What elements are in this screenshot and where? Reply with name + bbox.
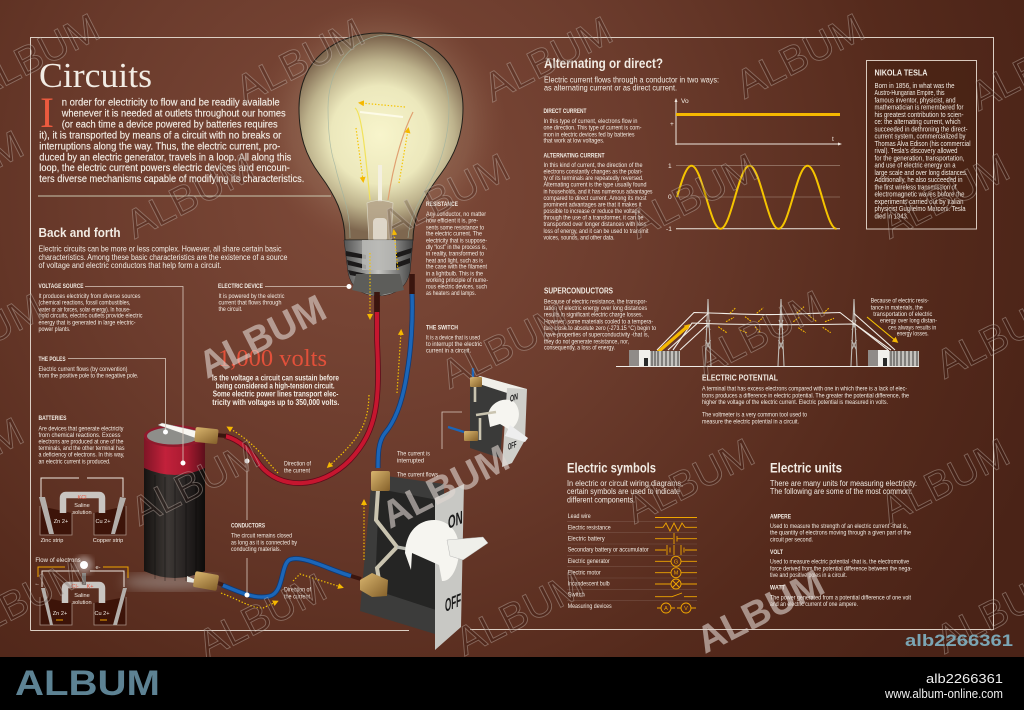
text: voltage source: power plants.	[38, 326, 71, 333]
text: batteries: from chemical reactions. Excess	[38, 432, 121, 439]
panel: nikola tesla: Born in 1856, in what was the	[874, 81, 954, 90]
text: batteries: a deficiency of electrons. In this way,	[38, 452, 125, 459]
alternating current text: electrons constantly changes as the polari-	[544, 169, 642, 176]
volt: Used to measure electric potential -that is, the electromotive	[770, 559, 909, 566]
text: voltage source: It produces electricity from diverse sources	[38, 293, 141, 300]
heading: Electric symbols	[567, 460, 656, 475]
text: energy losses note: tance in materials, the	[871, 304, 923, 311]
watermarks, outlined: ALBUM	[124, 433, 266, 534]
divider	[38, 195, 331, 197]
text: conductors	[231, 523, 298, 553]
text: energy losses note: energy over long distan-	[880, 318, 937, 325]
diagram: cell open circuit: Zinc strip	[41, 538, 63, 544]
watermarks, outlined: ALBUM	[449, 563, 591, 664]
watt: WATT	[770, 585, 785, 592]
text: electric potential: A terminal that has excess electrons compared with one in which there is a lack of elec-	[702, 386, 907, 393]
icon: main switch	[360, 471, 488, 650]
panel: alternating or direct	[544, 56, 719, 241]
text: energy losses note	[871, 298, 937, 338]
chart: direct current: t	[832, 136, 834, 143]
intro text: it), it is transported by means of a circuit with no breaks or	[39, 130, 282, 141]
icon: battery	[144, 423, 205, 583]
volt	[770, 549, 912, 579]
alternating current text: through the use of a transformer, it can be	[544, 215, 644, 222]
heading: Electric units	[770, 460, 842, 475]
icon: small switch, open: ON	[510, 391, 518, 404]
symbol names: Switch	[568, 592, 585, 599]
text: the switch: THE SWITCH	[426, 325, 458, 332]
label: current interrupted and flows: The current is	[397, 451, 431, 458]
on label: ON	[448, 508, 463, 534]
text: the switch: It is a device that is used	[426, 335, 480, 342]
label: current interrupted and flows	[397, 451, 439, 479]
panel: nikola tesla: Thomas Alva Edison (his commercial	[874, 139, 971, 148]
chart: alternating current: -1	[666, 226, 672, 233]
label: direction of the current, blue wire: the current	[284, 593, 310, 600]
text: superconductors: they do not generate resistance, nor,	[544, 338, 629, 345]
text: electric potential	[702, 374, 909, 425]
contact arm	[376, 490, 397, 580]
panel: nikola tesla	[866, 60, 976, 229]
diagram: cell closed circuit: solution	[72, 600, 92, 606]
label: current interrupted and flows: The current flows	[397, 472, 439, 479]
text: Electric circuits can be more or less complex. However, all share certain basic	[38, 244, 282, 254]
watermarks, outlined: ALBUM	[229, 11, 371, 112]
symbol names: Measuring devices	[568, 603, 612, 610]
ampere: AMPERE	[770, 513, 791, 520]
drop cap: I	[40, 90, 54, 137]
diagram: cell closed circuit: Cl-	[71, 584, 79, 590]
text: the switch	[426, 325, 483, 355]
filament	[355, 108, 413, 202]
text: energy losses note: energy losses.	[897, 331, 929, 338]
left power station	[629, 350, 680, 366]
diagram: cell open circuit: solution	[72, 510, 92, 516]
alternating current text: prominent advantages are that it makes it	[544, 202, 642, 208]
heading: Back and forth	[38, 226, 120, 240]
ampere: Used to measure the strength of an electric current -that is,	[770, 523, 908, 530]
text: resistance: the case with the filament	[426, 264, 487, 271]
panel: nikola tesla: succeeded in dethroning the direct-	[874, 124, 968, 133]
text: superconductors: Because of electric resistance, the transpor-	[544, 298, 647, 305]
panel: nikola tesla: for the generation, transportation,	[874, 153, 964, 162]
icon: light bulb	[299, 33, 463, 296]
direct current text: DIRECT CURRENT	[544, 108, 586, 115]
icon: connector, top	[194, 427, 219, 444]
diagram: cell closed circuit: e-	[96, 565, 101, 571]
panel: back and forth	[38, 226, 288, 270]
energy loss dashes	[718, 307, 834, 333]
alternating current text: ty of its terminals are repeatedly reversed.	[544, 175, 644, 182]
handle	[447, 537, 488, 560]
text: energy losses note: ces always results in	[888, 324, 937, 331]
callout: 1,000 volts: Is the voltage a circuit can sustain before	[212, 374, 339, 383]
watermarks, outlined: ALBUM	[874, 431, 1016, 532]
label: direction of the current, blue wire: Direction of	[284, 587, 311, 594]
text: superconductors	[544, 287, 656, 352]
panel: nikola tesla: Additionally, he also succeeded in	[874, 175, 963, 184]
plate	[435, 484, 464, 650]
diagram: power transmission	[616, 299, 919, 366]
text: superconductors: tation of electric energy over long distances	[544, 305, 648, 312]
rotary disc	[405, 520, 459, 581]
text: batteries: Are devices that generate electricity	[38, 425, 124, 432]
watermarks, outlined: ALBUM	[119, 146, 261, 247]
footer url: www.album-online.com	[884, 687, 1003, 701]
direct current text: that work at low voltages.	[544, 138, 605, 145]
panel: nikola tesla: NIKOLA TESLA	[874, 68, 928, 78]
text: batteries	[38, 415, 125, 465]
panel: nikola tesla: experiments carried out by Italian	[874, 197, 964, 206]
text: electric potential: higher the voltage of the electric current. Electric potential is measured in volts.	[702, 399, 888, 406]
panel: nikola tesla: the first wireless transmission of	[874, 182, 956, 191]
chart: alternating current	[666, 163, 840, 233]
symbol names: Electric generator	[568, 558, 610, 565]
panel: nikola tesla: physicist Guglielmo Marconi. Tesla	[874, 204, 966, 213]
panel: electric symbols: V	[684, 606, 688, 612]
right power station	[868, 350, 919, 366]
symbol names: Electric resistance	[568, 524, 611, 531]
chart: alternating current: 0	[668, 194, 672, 201]
watermarks, outlined: ALBUM	[434, 296, 576, 397]
callout: 1,000 volts: 1,000 volts	[218, 346, 327, 372]
text: voltage source: hold circuits, electric outlets provide electric	[38, 313, 143, 320]
text: characteristics. Among these basic characteristics are the existence of a source	[38, 252, 288, 262]
text: electric device	[218, 283, 285, 313]
diagram: cell closed circuit: Saline	[74, 593, 90, 599]
diagram: cell open circuit: Cu 2+	[95, 519, 111, 525]
text: resistance: the electric current. The	[426, 231, 482, 238]
panel: nikola tesla: large scale and over long distances.	[874, 168, 968, 177]
text: voltage source: water or air forces, solar energy). In house-	[38, 306, 130, 313]
volt: force derived from the potential difference between the nega-	[770, 565, 912, 572]
text: energy losses note: transportation of electric	[873, 311, 933, 318]
text: electric device: ELECTRIC DEVICE	[218, 283, 263, 290]
current direction arrows	[221, 103, 408, 608]
cables	[657, 312, 895, 350]
diagram: cell closed circuit: Zn 2+	[53, 611, 67, 617]
text: of voltage and electric conductors that help form a circuit.	[38, 260, 222, 270]
symbol names: Lead wire	[568, 513, 591, 520]
icon: small switch, open: OFF	[508, 439, 517, 453]
panel: electric symbols: G	[674, 559, 678, 565]
text: resistance: Any conductor, no matter	[426, 211, 487, 218]
panel: nikola tesla: mathematician is remembered for	[874, 103, 964, 112]
ground line	[616, 366, 919, 368]
text: conductors: The circuit remains closed	[231, 533, 292, 540]
outer frame	[30, 38, 994, 630]
panel: nikola tesla: ce: the alternating current, which	[874, 117, 961, 126]
text: resistance: dly “lost” in the process is,	[426, 244, 487, 251]
intro	[544, 75, 719, 93]
blue wire, upper	[378, 274, 412, 468]
volt: tive and positive poles in a circuit.	[770, 572, 847, 579]
glass stem	[367, 200, 393, 243]
footer id: alb2266361	[926, 671, 1003, 686]
panel: nikola tesla: and use of electric energy on a	[874, 161, 956, 170]
panel: title and introduction	[39, 56, 304, 185]
chart: direct current	[670, 98, 842, 146]
watermarks, outlined: ALBUM	[619, 431, 761, 532]
text: the switch: to interrupt the electric	[426, 341, 483, 348]
off label: OFF	[445, 590, 461, 617]
text: resistance: as heaters and lamps.	[426, 290, 476, 297]
label: direction of the current, red wire: the current	[284, 467, 310, 474]
text: the poles: Electric current flows (by convention)	[38, 366, 128, 373]
direct current text: one direction. This type of current is com-	[544, 125, 642, 132]
text: resistance	[425, 201, 488, 297]
panel: nikola tesla: current system, commercialized by	[874, 132, 966, 141]
direct current text: mon in electric devices fed by batteries	[544, 131, 635, 138]
diagram: cell open circuit: KCl	[77, 495, 87, 501]
label: direction of the current, red wire	[284, 461, 311, 474]
watt	[770, 585, 911, 608]
symbol names: Incandescent bulb	[568, 580, 610, 587]
direct current text	[544, 108, 642, 145]
text	[38, 244, 288, 270]
text: superconductors: SUPERCONDUCTORS	[544, 287, 613, 296]
text: electric device: the circuit.	[218, 306, 243, 313]
panel: nikola tesla: died in 1943.	[874, 211, 908, 220]
alternating current text: loss of energy, and it can be used to transmit	[544, 228, 649, 235]
separators	[567, 521, 697, 600]
text: resistance: how efficient it is, pre-	[426, 218, 478, 225]
yellow arrow, superconductor	[658, 326, 688, 352]
panel: nikola tesla: Austro-Hungarian Empire, this	[874, 88, 945, 97]
text: resistance: in a lightbulb. This is the	[426, 270, 483, 277]
callout: 1,000 volts: tricity with voltages up to 350,000 volts.	[212, 398, 339, 407]
battery halo	[122, 574, 218, 590]
text: energy losses note: Because of electric resis-	[871, 298, 929, 305]
intro text: n order for electricity to flow and be readily available	[62, 98, 280, 109]
icon: small switch, open	[448, 368, 528, 467]
chart: direct current: +	[670, 121, 674, 128]
intro: The following are some of the most common:	[770, 486, 912, 496]
footer logo: ALBUM	[15, 664, 160, 703]
text: conductors: conducting materials.	[231, 546, 281, 553]
chart: alternating current: 1	[668, 163, 672, 170]
alternating current text: Alternating current is the type usually found	[544, 182, 647, 189]
intro text: whenever it is needed at outlets throughout our homes	[61, 108, 286, 120]
text: superconductors: consequently, a loss of energy.	[544, 345, 615, 352]
text: the poles	[38, 356, 139, 380]
leader dots	[163, 284, 352, 598]
footer bar	[0, 657, 1024, 710]
alternating current text: ALTERNATING CURRENT	[544, 152, 604, 159]
text: resistance: heat and light, such as is	[426, 257, 484, 264]
text: resistance: sents some resistance to	[426, 224, 484, 231]
alternating current text: In this kind of current, the direction of the	[544, 162, 643, 169]
volt: VOLT	[770, 549, 783, 556]
text: batteries: BATTERIES	[38, 415, 67, 422]
diagram: cell open circuit	[39, 478, 126, 544]
intro text: interruptions along the way. Thus, the electric current, pro-	[39, 141, 280, 152]
connector bottom	[360, 573, 388, 597]
symbol names: Electric battery	[568, 535, 605, 542]
symbol names: Electric motor	[568, 569, 601, 576]
intro: certain symbols are used to indicate	[567, 486, 680, 496]
watermarks, outlined: ALBUM	[729, 6, 871, 107]
text: voltage source	[38, 283, 143, 333]
text: electric device: It is powered by the electric	[218, 293, 285, 300]
watermarks, outlined: ALBUM	[374, 146, 516, 247]
diagram: cell open circuit: Zn 2+	[54, 519, 68, 525]
text: electric potential: measure the electric potential in a circuit.	[702, 418, 799, 425]
watermarks, outlined: ALBUM	[689, 283, 831, 384]
label: direction of the current, blue wire	[284, 587, 311, 600]
text: voltage source: VOLTAGE SOURCE	[38, 283, 84, 290]
intro text: loop, the electric current powers electric devices and encoun-	[39, 163, 290, 174]
watermarks, bright: ALBUM	[192, 287, 333, 387]
intro text: ters diverse mechanisms capable of modifying its characteristics.	[39, 174, 304, 185]
diagram: cell open circuit: Saline	[74, 503, 90, 509]
text: batteries: electrons are produced at one of the	[38, 438, 124, 445]
diagram: cell closed circuit: Flow of electrons	[35, 558, 81, 564]
image id overlay: alb2266361	[905, 631, 1013, 650]
alternating current text: compared to direct current. Among its most	[544, 195, 647, 202]
watermarks, outlined: ALBUM	[622, 146, 764, 247]
intro	[567, 478, 683, 504]
alternating current text: transported over longer distances with less	[544, 221, 647, 228]
title: Circuits	[39, 56, 152, 95]
text: electric potential: trons produces a difference in electric potential. The greater the potential difference, the	[702, 392, 909, 399]
text: resistance: rous electric devices, such	[426, 283, 487, 290]
alternating current text	[544, 152, 653, 241]
text: the switch: current in a circuit.	[426, 348, 471, 355]
text: electric device: current that flows through	[218, 300, 282, 307]
panel: nikola tesla: rival). Tesla's discovery allowed	[874, 146, 958, 155]
text: conductors: CONDUCTORS	[231, 523, 265, 530]
text: resistance: RESISTANCE	[426, 201, 458, 208]
ampere: circuit per second.	[770, 536, 813, 543]
intro: In electric or circuit wiring diagrams,	[567, 478, 683, 488]
ampere: the quantity of electrons moving through a given part of the	[770, 530, 911, 537]
text: conductors: as long as it is connected by	[231, 539, 298, 546]
intro: Electric current flows through a conductor in two ways:	[544, 75, 719, 85]
callout: 1,000 volts: Some electric power lines transport elec-	[213, 390, 339, 399]
direct current text: In this type of current, electrons flow in	[544, 118, 638, 125]
symbols	[655, 518, 697, 613]
intro: as alternating current or as direct current.	[544, 83, 677, 93]
alternating current text: possible to increase or reduce the voltage	[544, 208, 641, 215]
panel: electric symbols	[567, 460, 697, 613]
watermarks, outlined: ALBUM	[874, 146, 1016, 247]
text: resistance: electricity that is suppose-	[426, 237, 487, 244]
intro text: duced by an electric generator, travels in a loop. All along this	[39, 152, 291, 163]
bulb glow	[256, 0, 506, 250]
callout: 1,000 volts	[212, 346, 339, 407]
panel: nikola tesla: famous inventor, physicist, and	[874, 96, 956, 104]
alternating current text: voices, sounds, and other data.	[544, 234, 615, 241]
text: voltage source: (chemical reactions, fossil combustibles,	[38, 300, 131, 307]
heading: Alternating or direct?	[544, 56, 663, 71]
diagram: cell open circuit: Copper strip	[93, 538, 123, 544]
watt: The power generated from a potential difference of one volt	[770, 594, 911, 601]
label: current interrupted and flows: interrupted	[397, 457, 424, 464]
towers	[705, 299, 857, 366]
text: superconductors: results in significant electric charge losses.	[544, 312, 643, 319]
panel: electric symbols: M	[674, 571, 679, 577]
blue wire, lower	[218, 559, 361, 597]
text: electric potential: The voltmeter is a very common tool used to	[702, 412, 807, 419]
text: resistance: working principle of nume-	[425, 277, 488, 284]
intro text: (or each time a device powered by batteries requires	[62, 119, 278, 130]
chart: direct current: Vo	[681, 98, 689, 105]
text: batteries: an electric current is produced.	[38, 458, 111, 465]
panel: nikola tesla: electromagnetic waves before the	[874, 190, 964, 199]
panel: electric symbols: A	[664, 606, 668, 612]
connector top	[371, 471, 390, 491]
icon: connector, bottom	[193, 571, 219, 591]
watermarks, outlined: ALBUM	[477, 9, 619, 110]
symbol names	[568, 513, 649, 610]
text: the poles: THE POLES	[38, 356, 66, 363]
text: the poles: from the positive pole to the negative pole.	[38, 372, 139, 380]
label: direction of the current, red wire: Direction of	[284, 461, 311, 468]
text: superconductors: However, some materials cooled to a tempera-	[544, 318, 653, 325]
panel: electric units	[770, 460, 917, 608]
intro	[770, 478, 917, 496]
watermarks, bright	[192, 287, 831, 662]
intro: different components.	[567, 494, 635, 504]
positive terminal tab	[158, 423, 197, 438]
text: batteries: terminals, and the other terminal has	[38, 445, 125, 452]
diagram: cell closed circuit: Cu 2+	[94, 611, 110, 617]
intro text	[39, 98, 304, 185]
ampere	[770, 513, 911, 543]
alternating current text: in households, and it has numerous advantages	[544, 188, 653, 195]
intro: There are many units for measuring electricity.	[770, 478, 917, 488]
text: electric potential: ELECTRIC POTENTIAL	[702, 374, 778, 383]
text: voltage source: energy that is generated in large electric-	[38, 319, 136, 326]
diagram: cell closed circuit: K+	[86, 584, 94, 590]
red wire	[216, 292, 378, 483]
panel: nikola tesla: his greatest contribution to scien-	[874, 110, 964, 119]
text: superconductors: have properties of superconductivity -that is,	[544, 332, 649, 339]
symbol names: Secondary battery or accumulator	[568, 547, 649, 554]
yellow arrow, losses	[867, 317, 896, 341]
leader lines	[68, 286, 462, 595]
watermarks, bright: ALBUM	[690, 562, 831, 662]
diagram: cell closed circuit	[34, 556, 128, 625]
screw base	[344, 240, 413, 296]
watt: and an electric current of one ampere.	[770, 601, 858, 608]
diagram: cell closed circuit: ←	[34, 581, 40, 587]
callout: 1,000 volts: being considered a high-tension circuit.	[216, 382, 335, 391]
text: superconductors: ture close to absolute zero (-273.15 °C) begin to	[544, 324, 656, 332]
watermarks, outlined: ALBUM	[191, 566, 333, 667]
text: resistance: in reality, transformed to	[426, 251, 484, 258]
watermarks, bright: ALBUM	[375, 437, 516, 537]
